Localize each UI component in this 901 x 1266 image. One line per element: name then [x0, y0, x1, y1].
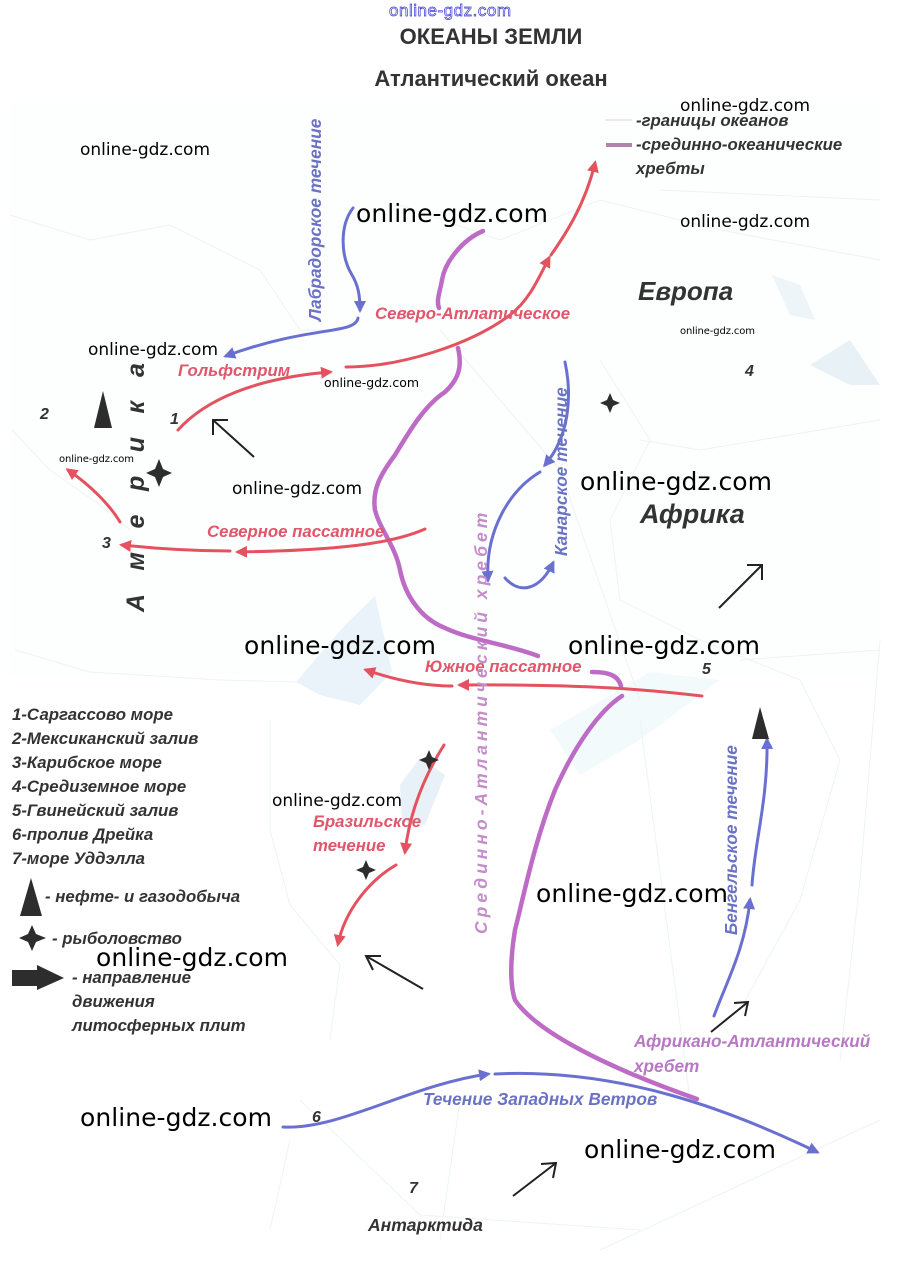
- current labels: течение: [313, 836, 385, 855]
- sea numbers: 5: [702, 661, 712, 678]
- online-gdz watermarks: online-gdz.com: [680, 96, 810, 116]
- place labels: [122, 276, 745, 1235]
- sea numbers: 2: [39, 406, 49, 423]
- legend: symbols: литосферных плит: [71, 1016, 246, 1035]
- current labels: Северо-Атлатическое: [375, 304, 570, 323]
- sea numbers: 4: [744, 363, 754, 380]
- mid-ocean ridges: [374, 231, 697, 1099]
- current labels: Срединно-Атлантический хребет: [471, 509, 491, 934]
- current labels: Бразильское: [313, 812, 421, 831]
- online-gdz watermarks: online-gdz.com: [680, 212, 810, 232]
- legend: symbols: - направление: [72, 968, 191, 987]
- site watermark top: online-gdz.com: [389, 1, 511, 20]
- legend: seas: 6-пролив Дрейка: [12, 825, 153, 844]
- online-gdz watermarks: online-gdz.com: [88, 340, 218, 360]
- online-gdz watermarks: online-gdz.com: [272, 791, 402, 811]
- current labels: Гольфстрим: [178, 361, 291, 380]
- place labels: Антарктида: [367, 1215, 483, 1235]
- legend: seas: 7-море Уддэлла: [12, 849, 145, 868]
- legend: seas: [11, 705, 198, 868]
- legend: seas: 3-Карибское море: [12, 753, 162, 772]
- oil and gas markers: [94, 391, 769, 739]
- sea numbers: 6: [312, 1109, 321, 1126]
- online-gdz watermarks: online-gdz.com: [580, 467, 772, 496]
- place labels: Африка: [639, 499, 745, 529]
- online-gdz watermarks: online-gdz.com: [680, 326, 755, 337]
- current labels: Бенгельское течение: [721, 745, 741, 935]
- online-gdz watermarks: online-gdz.com: [324, 375, 419, 390]
- title: ОКЕАНЫ ЗЕМЛИ: [400, 24, 582, 49]
- online-gdz watermarks: online-gdz.com: [536, 879, 728, 908]
- legend: boundaries and ridges: -срединно-океанические: [636, 135, 842, 154]
- legend: symbols: [12, 878, 246, 1035]
- online-gdz watermarks: online-gdz.com: [568, 631, 760, 660]
- legend: symbols: - нефте- и газодобыча: [45, 887, 240, 906]
- sea numbers: 3: [102, 535, 111, 552]
- legend: seas: 4-Средиземное море: [11, 777, 186, 796]
- current labels: Течение Западных Ветров: [423, 1089, 657, 1109]
- warm currents: [68, 163, 702, 944]
- place labels: Европа: [638, 276, 733, 306]
- online-gdz watermarks: online-gdz.com: [356, 199, 548, 228]
- online-gdz watermarks: online-gdz.com: [96, 943, 288, 972]
- sea numbers: 1: [170, 411, 179, 428]
- subtitle: Атлантический океан: [374, 66, 608, 91]
- current labels: [178, 118, 871, 1109]
- legend: boundaries and ridges: -границы океанов: [636, 111, 788, 130]
- online-gdz watermarks: online-gdz.com: [59, 454, 134, 465]
- plate motion arrows: [213, 420, 762, 1196]
- online-gdz watermarks: online-gdz.com: [232, 479, 362, 499]
- current labels: Северное пассатное: [207, 522, 384, 541]
- online-gdz watermarks: [59, 96, 810, 1164]
- current labels: хребет: [633, 1056, 699, 1076]
- legend: boundaries and ridges: [605, 111, 842, 178]
- online-gdz watermarks: online-gdz.com: [80, 1103, 272, 1132]
- legend: symbols: движения: [72, 992, 155, 1011]
- legend: seas: 2-Мексиканский залив: [11, 729, 198, 748]
- fishing markers: [146, 393, 620, 880]
- legend: symbols: - рыболовство: [52, 929, 182, 948]
- legend: seas: 1-Саргассово море: [12, 705, 173, 724]
- online-gdz watermarks: online-gdz.com: [584, 1135, 776, 1164]
- sea numbers: 7: [409, 1180, 419, 1197]
- legend: boundaries and ridges: хребты: [635, 159, 705, 178]
- place labels: Америка: [122, 340, 150, 613]
- current labels: Африкано-Атлантический: [633, 1031, 871, 1051]
- online-gdz watermarks: online-gdz.com: [244, 631, 436, 660]
- current labels: Южное пассатное: [425, 657, 581, 676]
- cold currents: [226, 208, 817, 1152]
- current labels: Канарское течение: [551, 387, 571, 556]
- current labels: Лабрадорское течение: [305, 118, 325, 323]
- legend: seas: 5-Гвинейский залив: [12, 801, 178, 820]
- online-gdz watermarks: online-gdz.com: [80, 140, 210, 160]
- sea numbers: [39, 363, 754, 1197]
